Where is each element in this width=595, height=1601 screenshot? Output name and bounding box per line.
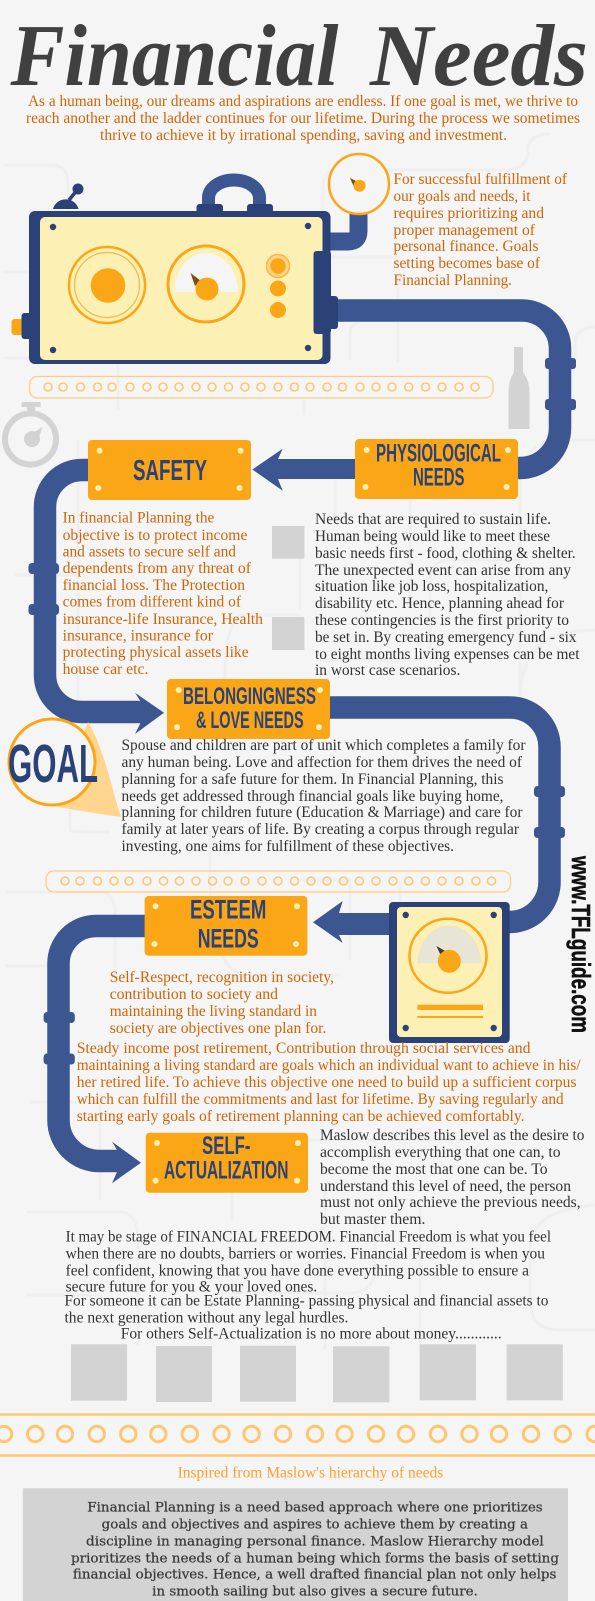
main gauge [168,246,244,322]
maslow text [320,1127,584,1228]
dotted strip one [30,376,493,398]
financial freedom text: secure future for you & your loved ones. [66,1279,317,1296]
arrow: meter to esteem [313,901,395,943]
meter panel [389,902,510,1043]
bottom ring band [0,1413,595,1457]
goal setting text: setting becomes base of [394,255,541,272]
label: belongingness and love needs: & LOVE NEEDS [196,707,304,734]
icon: goal magnifier [8,719,121,817]
retirement text: which can fulfill the commitments and last for lifetime. By saving regularly and [77,1091,564,1108]
safety text: house car etc. [63,661,148,678]
goal setting text: personal finance. Goals [394,238,538,255]
pipe: safety to belongingness [28,470,142,712]
machine lever [53,184,84,209]
pipe: esteem to self-actualization [44,926,150,1161]
title [10,8,588,105]
maslow text: understand this level of need, the person [320,1178,571,1195]
esteem text [110,969,334,1037]
arrow: into self-actualization [112,1142,141,1183]
machine body [29,211,330,364]
goal setting text: For successful fulfillment of [394,171,568,188]
maslow text: must not only achieve the previous needs, [320,1194,581,1211]
safety text: financial loss. The Protection [63,577,245,594]
intro text: thrive to achieve it by irrational spending, saving and investment. [100,127,507,144]
belongingness text: needs get addressed through financial goals like buying home, [122,788,504,805]
summary text [71,1501,559,1600]
financial freedom text: when there are no doubts, barriers or worries. Financial Freedom is when you [66,1246,545,1263]
goal setting text: proper management of [394,222,536,239]
physiological needs text: in worst case scenarios. [315,662,460,679]
retirement text: starting early goals of retirement planning can be achieved comfortably. [77,1108,524,1125]
label: safety [88,440,251,500]
physiological needs text: The unexpected event can arise from any [315,562,571,579]
physiological needs text: to eight months living expenses can be met [315,646,580,663]
maslow text: Maslow describes this level as the desire to [320,1127,584,1144]
safety text: insurance-life Insurance, Health [63,611,263,628]
goal setting text: requires prioritizing and [394,205,544,222]
esteem text: society are objectives one plan for. [110,1020,326,1037]
label: self-actualization: SELF- [202,1132,250,1160]
safety text: protecting physical assets like [63,644,249,661]
belongingness text: any human being. Love and affection for them drives the need of [122,754,523,771]
esteem text: Self-Respect, recognition in society, [110,969,334,986]
pipe: belongingness to esteem [328,708,565,922]
label: physiological needs: NEEDS [413,465,464,492]
goal setting text [394,171,568,289]
retirement text: maintaining a living standard are goals which an individual want to achieve in his/ [77,1057,581,1074]
label: self-actualization: ACTUALIZATION [164,1156,288,1184]
label: physiological needs: PHYSIOLOGICAL [376,441,501,468]
icon: stopwatch [5,402,56,464]
intro text [26,93,580,144]
label: esteem needs: ESTEEM [190,894,266,924]
maslow text: become the most that one can be. To [320,1161,548,1178]
physiological needs text: situation like job loss, hospitalization, [315,578,548,595]
intro text: As a human being, our dreams and aspirations are endless. If one goal is met, we thrive to [28,93,578,110]
safety text [63,510,263,678]
esteem text: contribution to society and [110,986,278,1003]
financial freedom text: For others Self-Actualization is no more about money............ [121,1326,502,1343]
machine illustration [12,154,389,364]
label: physiological needs [355,439,518,499]
maslow text: but master them. [320,1211,425,1228]
physiological needs text: Human being would like to meet these [315,528,550,545]
machine side knob [12,313,32,339]
placeholder squares [272,526,304,650]
summary text: prioritizes the needs of a human being which forms the basis of setting [71,1552,559,1567]
gauge pipe [328,212,358,242]
machine handle [196,180,273,213]
financial freedom text: the next generation without any legal hurdles. [64,1310,348,1327]
summary text: goals and objectives and aspires to achieve them by creating a [102,1518,528,1533]
financial freedom text: It may be stage of FINANCIAL FREEDOM. Financial Freedom is what you feel [66,1229,552,1246]
indicator lights [266,254,290,318]
summary text: financial objectives. Hence, a well drafted financial plan not only helps [73,1568,556,1583]
belongingness text: planning for a safe future for them. In Financial Planning, this [122,771,504,788]
financial freedom text [64,1229,552,1343]
inspired credit: Inspired from Maslow's hierarchy of needs [178,1465,443,1482]
retirement text: Steady income post retirement, Contribution through social services and [77,1040,530,1057]
placeholder image row [71,1344,563,1402]
pipe: machine to physiological needs [338,310,576,468]
safety text: and assets to secure self and [63,544,236,561]
dotted strip two [46,871,510,892]
title: Financial [10,8,339,105]
label: safety: SAFETY [133,455,207,487]
icon: bottle [508,347,530,429]
safety text: In financial Planning the [63,510,214,527]
label: esteem needs: NEEDS [198,923,259,953]
belongingness text [122,737,526,855]
esteem text: maintaining the living standard in [110,1003,317,1020]
intro text: reach another and the ladder continues for our lifetime. During the process we sometimes [26,110,580,127]
label: belongingness and love needs: BELONGINGNESS [183,683,316,710]
speaker dial [69,247,145,323]
safety text: dependents from any threat of [63,560,252,577]
arrow: physiological to safety [252,449,355,491]
physiological needs text: these contingencies is the first priority to [315,612,569,629]
belongingness text: family at later years of life. By creating a corpus through regular [122,821,520,838]
physiological needs text [315,511,580,679]
financial freedom text: feel confident, knowing that you have done everything possible to ensure a [66,1263,529,1280]
arrow: into belongingness [135,693,164,734]
maslow text: accomplish everything that one can, to [320,1144,560,1161]
physiological needs text: be set in. By creating emergency fund - six [315,629,576,646]
physiological needs text: Needs that are required to sustain life. [315,511,551,528]
safety text: insurance, insurance for [63,628,214,645]
summary text: discipline in managing personal finance. Maslow Hierarchy model [86,1535,544,1550]
summary text: in smooth sailing but also gives a secure future. [152,1585,478,1600]
label: self-actualization [146,1132,308,1193]
physiological needs text: disability etc. Hence, planning ahead for [315,595,565,612]
icon: goal magnifier: GOAL [8,734,98,794]
summary text: Financial Planning is a need based approach where one prioritizes [87,1501,543,1516]
financial freedom text: For someone it can be Estate Planning- passing physical and financial assets to [64,1293,548,1310]
belongingness text: Spouse and children are part of unit which completes a family for [122,737,526,754]
small round gauge [329,154,389,214]
safety text: comes from different kind of [63,594,242,611]
panel: summary [23,1488,568,1601]
physiological needs text: basic needs first - food, clothing & shelter. [315,545,576,562]
goal setting text: our goals and needs, it [394,188,531,205]
belongingness text: planning for children future (Education & Marriage) and care for [122,804,523,821]
title: Needs [369,8,588,105]
label: belongingness and love needs [167,679,330,739]
safety text: objective is to protect income [63,527,247,544]
retirement text [77,1040,581,1125]
label: esteem needs [145,894,307,956]
goal setting text: Financial Planning. [394,272,512,289]
retirement text: her retired life. To achieve this objective one need to build up a sufficient corpus [77,1074,576,1091]
belongingness text: investing, one aims for fulfillment of these objectives. [122,838,454,855]
